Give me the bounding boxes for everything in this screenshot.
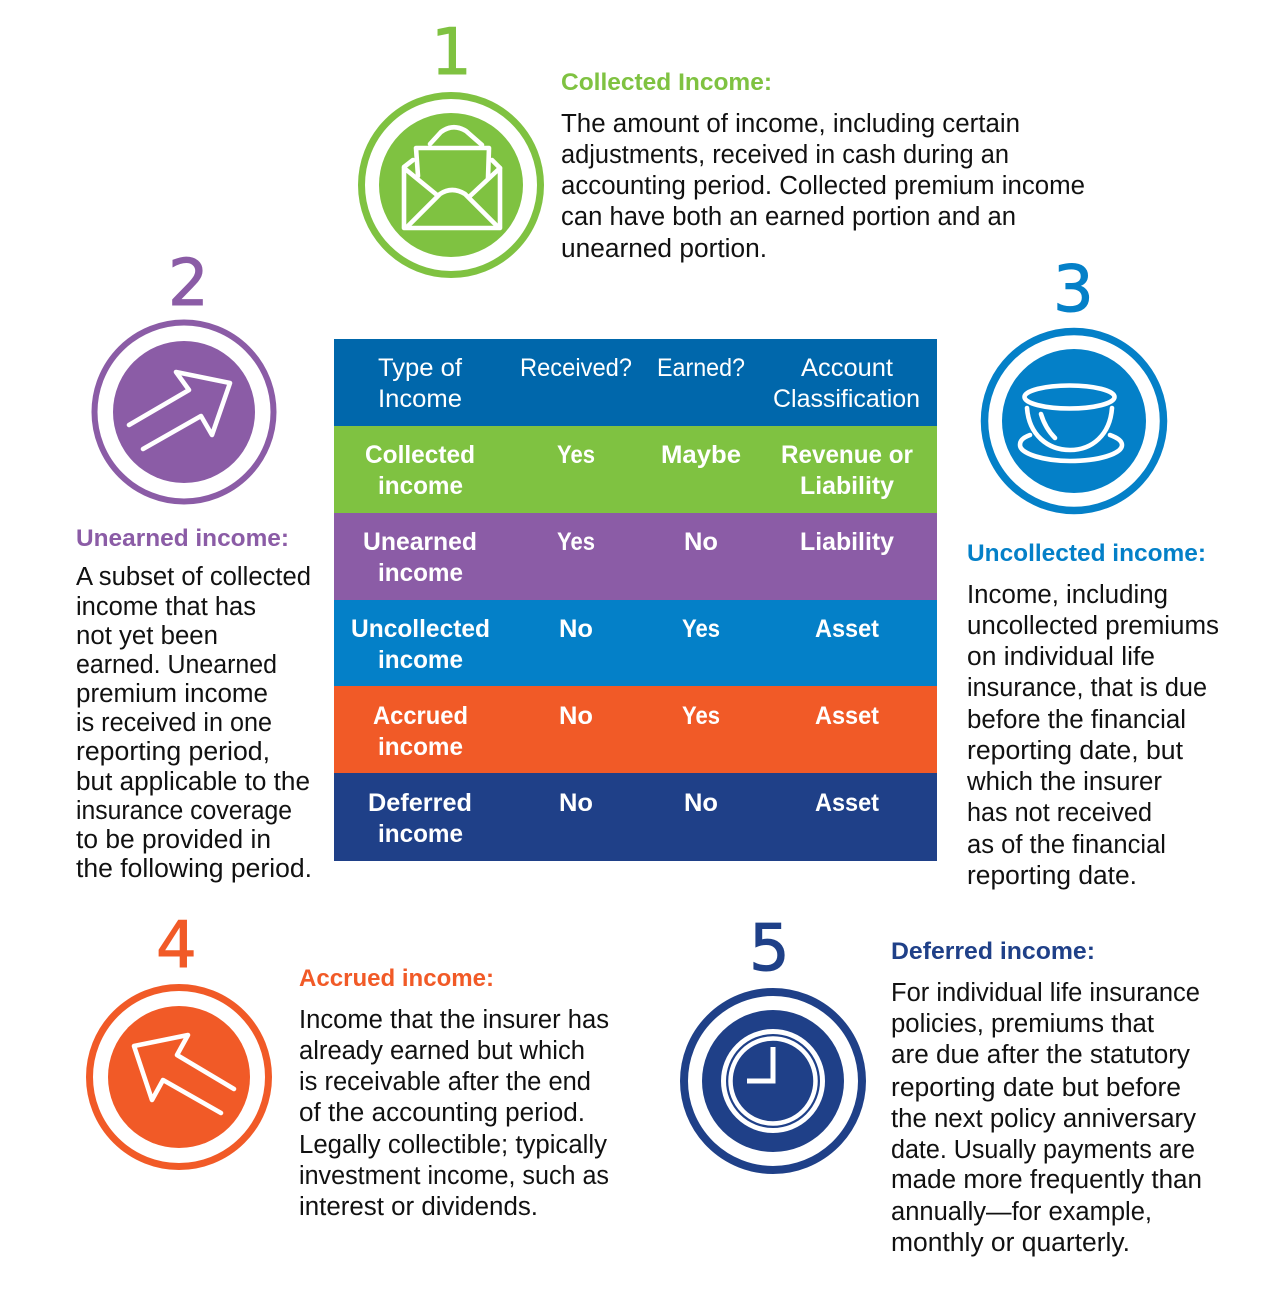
icon: open envelope — [362, 96, 540, 274]
number 3: 3 — [1053, 253, 1094, 327]
text block: deferred income: reporting date but before — [891, 1074, 1181, 1102]
table row: collected income: Maybe — [661, 441, 741, 469]
text block: uncollected income: before the financial — [967, 706, 1186, 734]
text block: unearned income: premium income — [76, 680, 268, 708]
text block: accrued income: investment income, such as — [299, 1162, 609, 1190]
table row: collected income: income — [378, 472, 463, 500]
table row: uncollected income: Asset — [815, 615, 880, 643]
table row: unearned income: Yes — [557, 528, 595, 556]
text block: deferred income: policies, premiums that — [891, 1010, 1154, 1038]
text block: collected income: adjustments, received in cash during an — [561, 141, 1009, 169]
text block: uncollected income: Income, including — [967, 581, 1168, 609]
table row: deferred income: No — [684, 789, 718, 817]
table row: deferred income: Deferred — [368, 789, 472, 817]
text block: collected income: The amount of income, including certain — [561, 110, 1020, 138]
text block: unearned income: income that has — [76, 593, 256, 621]
number 5: 5 — [749, 912, 790, 986]
text block: uncollected income: uncollected premiums — [967, 612, 1219, 640]
table row: collected income: Liability — [800, 472, 894, 500]
text block: unearned income: to be provided in — [76, 826, 271, 854]
icon: arrow up-right — [94, 322, 274, 502]
table row: unearned income: Unearned — [363, 528, 477, 556]
table row: accrued income: No — [559, 702, 593, 730]
text block: deferred income — [891, 938, 1202, 1257]
table header row: Type of — [378, 354, 462, 382]
text block: accrued income: interest or dividends. — [299, 1193, 538, 1221]
text block: accrued income: is receivable after the end — [299, 1068, 591, 1096]
text block: unearned income: insurance coverage — [76, 797, 292, 825]
text block: accrued income: already earned but which — [299, 1037, 585, 1065]
text block: unearned income: reporting period, — [76, 738, 270, 766]
text block: accrued income: Income that the insurer has — [299, 1006, 609, 1034]
text block: uncollected income: reporting date, but — [967, 737, 1183, 765]
text block: uncollected income: which the insurer — [966, 768, 1163, 796]
text block: unearned income: Unearned income: — [76, 525, 289, 552]
table: income types — [334, 339, 937, 861]
table row: accrued income: Asset — [815, 702, 880, 730]
text block: unearned income: but applicable to the — [76, 768, 310, 796]
table row: deferred income: No — [559, 789, 593, 817]
text block: unearned income: not yet been — [76, 622, 218, 650]
table row: collected income: Collected — [365, 441, 475, 469]
table header row: Classification — [773, 385, 920, 413]
text block: collected income: accounting period. Collected premium income — [561, 172, 1085, 200]
text block: accrued income — [299, 965, 609, 1221]
text block: uncollected income: on individual life — [967, 643, 1155, 671]
table row: accrued income — [334, 686, 937, 773]
text block: uncollected income: Uncollected income: — [967, 540, 1206, 567]
text block: uncollected income — [966, 540, 1219, 890]
text block: unearned income — [76, 525, 312, 883]
table header row: Income — [378, 385, 462, 413]
text block: uncollected income: insurance, that is due — [967, 674, 1207, 702]
text block: accrued income: Accrued income: — [299, 965, 494, 992]
number 1: 1 — [431, 16, 472, 90]
table row: collected income — [334, 426, 937, 513]
text block: deferred income: monthly or quarterly. — [891, 1229, 1130, 1257]
table row: uncollected income: Yes — [682, 615, 720, 643]
text block: deferred income: Deferred income: — [891, 938, 1095, 965]
text block: uncollected income: has not received — [967, 799, 1152, 827]
table row: unearned income: No — [684, 528, 718, 556]
table row: deferred income: Asset — [815, 789, 880, 817]
table row: uncollected income: No — [559, 615, 593, 643]
number 2: 2 — [168, 247, 209, 321]
table header row: Received? — [520, 354, 632, 382]
table row: unearned income: Liability — [800, 528, 894, 556]
table row: accrued income: Yes — [682, 702, 720, 730]
table row: unearned income: income — [378, 559, 463, 587]
icon: cup and saucer — [984, 332, 1164, 510]
text block: deferred income: annually—for example, — [891, 1198, 1152, 1226]
table row: unearned income — [334, 513, 937, 600]
text block: accrued income: of the accounting period. — [299, 1099, 585, 1127]
icon: arrow up-left — [90, 988, 268, 1166]
text block: deferred income: are due after the statutory — [891, 1041, 1190, 1069]
table row: collected income: Yes — [557, 441, 595, 469]
text block: collected income: unearned portion. — [561, 235, 767, 263]
icon: clock — [684, 992, 862, 1170]
number 4: 4 — [156, 909, 197, 983]
text block: uncollected income: reporting date. — [967, 862, 1137, 890]
text block: deferred income: the next policy anniversary — [891, 1105, 1196, 1133]
table row: collected income: Revenue or — [781, 441, 913, 469]
text block: deferred income: For individual life insurance — [891, 979, 1200, 1007]
text block: unearned income: A subset of collected — [76, 563, 311, 591]
table row: deferred income — [334, 773, 937, 861]
table row: accrued income: Accrued — [373, 702, 468, 730]
table header row — [334, 339, 937, 426]
text block: unearned income: is received in one — [76, 709, 272, 737]
text block: collected income: Collected Income: — [561, 69, 772, 96]
table row: deferred income: income — [378, 820, 463, 848]
text block: deferred income: made more frequently than — [891, 1166, 1202, 1194]
table row: accrued income: income — [378, 733, 463, 761]
table row: uncollected income: Uncollected — [351, 615, 490, 643]
text block: unearned income: the following period. — [76, 855, 312, 883]
text block: deferred income: date. Usually payments are — [891, 1136, 1195, 1164]
text block: collected income: can have both an earned portion and an — [561, 203, 1016, 231]
text block: unearned income: earned. Unearned — [76, 651, 277, 679]
text block: collected income — [561, 69, 1085, 263]
text block: uncollected income: as of the financial — [967, 831, 1166, 859]
text block: accrued income: Legally collectible; typically — [299, 1131, 607, 1159]
table header row: Earned? — [657, 354, 745, 382]
table header row: Account — [801, 354, 893, 382]
table row: uncollected income: income — [378, 646, 463, 674]
table row: uncollected income — [334, 600, 937, 686]
